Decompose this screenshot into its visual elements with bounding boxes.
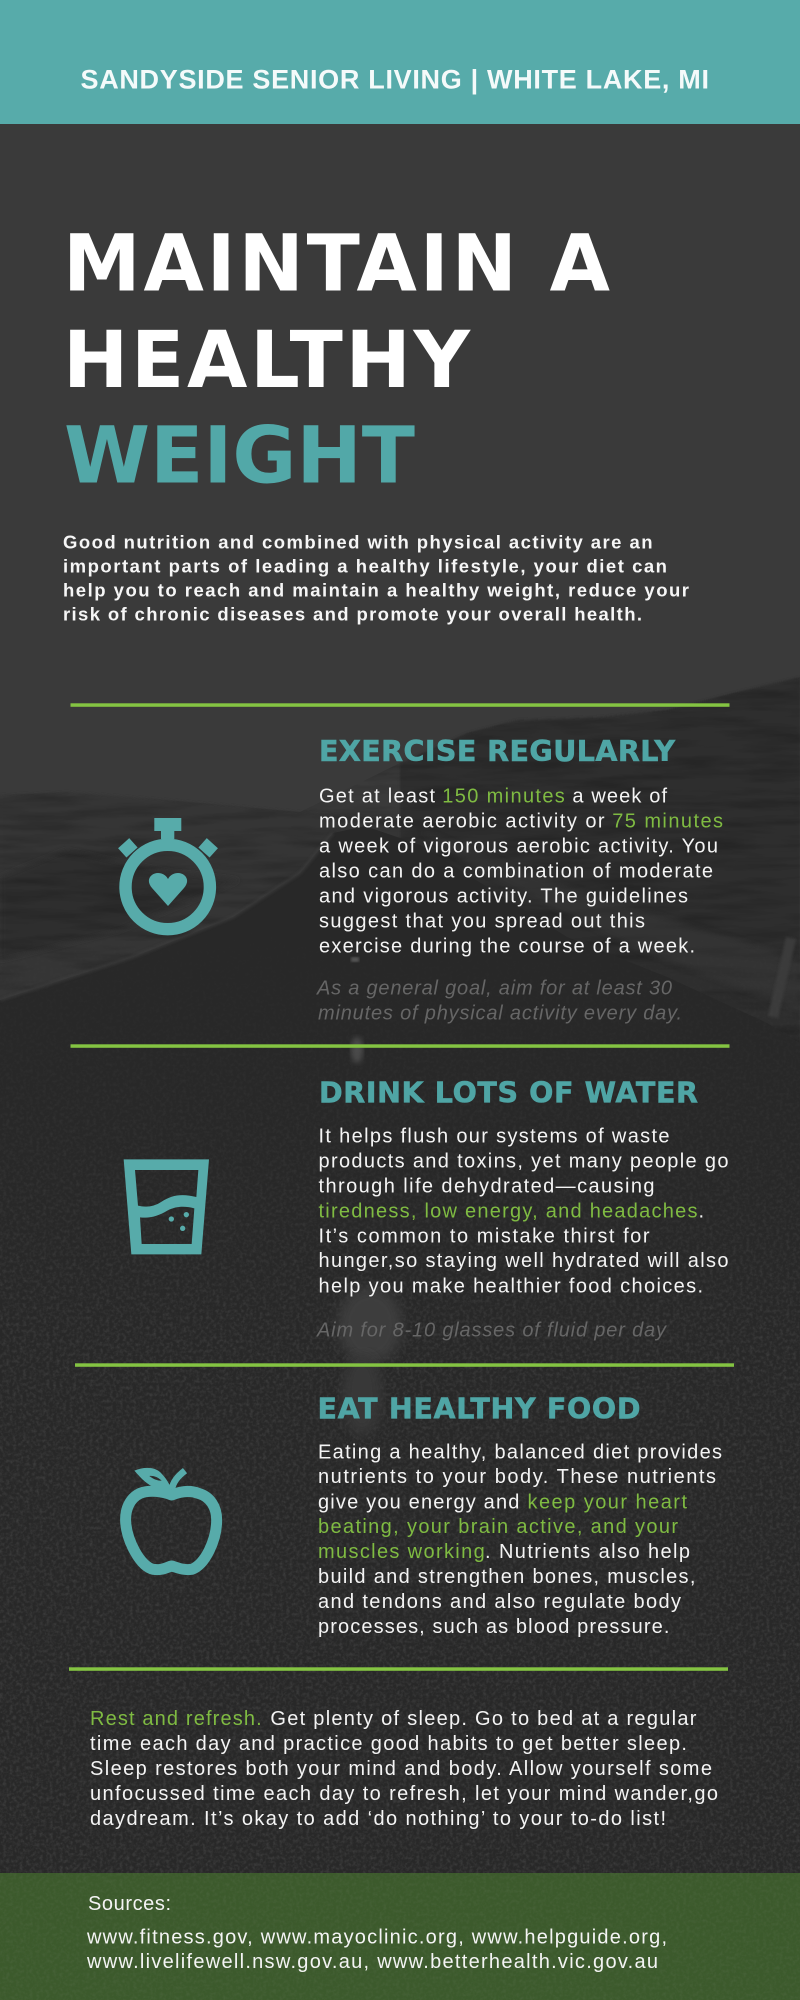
source links: www.livelifewell.nsw.gov.au, www.betterhealth.vic.gov.au: [86, 1951, 658, 1973]
heading: EAT HEALTHY FOOD: [318, 1393, 640, 1426]
body text: [318, 1125, 728, 1297]
rest and refresh paragraph: unfocussed time each day to refresh, let your mind wander,go: [90, 1783, 718, 1805]
body text: help you make healthier food choices.: [318, 1275, 703, 1297]
rest and refresh paragraph: daydream. It’s okay to add ‘do nothing’ to your to-do list!: [90, 1808, 666, 1830]
body text: 150 minutes: [442, 785, 565, 807]
intro paragraph: [63, 532, 689, 625]
body text: beating, your brain active, and your: [318, 1516, 678, 1538]
sources label: Sources:: [88, 1893, 171, 1915]
body text: It helps flush our systems of waste: [318, 1125, 670, 1147]
heading: EXERCISE REGULARLY: [319, 735, 675, 768]
rest and refresh paragraph: Rest and refresh.: [90, 1708, 262, 1730]
body text: and tendons and also regulate body: [318, 1591, 681, 1613]
body text: muscles working: [318, 1541, 485, 1563]
heading: DRINK LOTS OF WATER: [319, 1076, 698, 1109]
panel: drink lots of water: [124, 1076, 729, 1342]
footer band: sources: [0, 1873, 800, 2000]
body text: tiredness, low energy, and headaches: [318, 1200, 698, 1222]
body text: 75 minutes: [612, 810, 723, 832]
body text: processes, such as blood pressure.: [318, 1616, 669, 1638]
body text: build and strengthen bones, muscles,: [318, 1566, 695, 1588]
body text: Get at least: [319, 785, 435, 807]
divider 1: [70, 703, 730, 707]
rest and refresh paragraph: [90, 1708, 718, 1830]
title: MAINTAIN A: [63, 220, 610, 310]
title: [63, 220, 610, 502]
body text: give you energy and: [318, 1491, 519, 1513]
divider 4: [69, 1667, 728, 1671]
body text: [318, 1441, 722, 1638]
title: HEALTHY: [63, 316, 472, 406]
rest and refresh paragraph: time each day and practice good habits to get better sleep.: [90, 1733, 687, 1755]
body text: a week of: [572, 785, 667, 807]
header band: [0, 0, 800, 124]
panel: exercise regularly: [118, 735, 723, 1024]
intro paragraph: important parts of leading a healthy lifestyle, your diet can: [63, 555, 667, 576]
goal note: As a general goal, aim for at least 30: [316, 977, 672, 999]
body text: .: [698, 1200, 704, 1222]
rest and refresh paragraph: Get plenty of sleep. Go to bed at a regular: [270, 1708, 697, 1730]
body text: suggest that you spread out this: [319, 911, 645, 933]
panel: eat healthy food: [126, 1393, 722, 1638]
body text: Eating a healthy, balanced diet provides: [318, 1441, 722, 1463]
goal note: minutes of physical activity every day.: [318, 1002, 682, 1024]
body text: a week of vigorous aerobic activity. You: [319, 836, 718, 858]
background photo: mountain road: [0, 678, 800, 1873]
source links: [86, 1926, 667, 1973]
divider 3: [75, 1363, 734, 1367]
icon: stopwatch with heart: [118, 818, 218, 929]
body text: exercise during the course of a week.: [319, 935, 695, 957]
body text: It’s common to mistake thirst for: [318, 1225, 650, 1247]
body text: . Nutrients also help: [485, 1541, 690, 1563]
body text: keep your heart: [528, 1491, 687, 1513]
body text: [319, 785, 723, 957]
icon: apple: [126, 1468, 217, 1570]
intro paragraph: Good nutrition and combined with physical activity are an: [63, 532, 652, 553]
body text: nutrients to your body. These nutrients: [318, 1466, 716, 1488]
divider 2: [70, 1044, 730, 1048]
intro paragraph: help you to reach and maintain a healthy weight, reduce your: [63, 579, 689, 600]
icon: glass of water: [124, 1159, 209, 1254]
rest and refresh paragraph: Sleep restores both your mind and body. Allow yourself some: [90, 1758, 712, 1780]
source links: www.fitness.gov, www.mayoclinic.org, www.helpguide.org,: [86, 1926, 667, 1948]
body text: and vigorous activity. The guidelines: [319, 886, 688, 908]
body text: also can do a combination of moderate: [319, 860, 713, 882]
title: WEIGHT: [64, 412, 415, 502]
hydration note: Aim for 8-10 glasses of fluid per day: [316, 1320, 667, 1342]
body text: hunger,so staying well hydrated will also: [318, 1250, 728, 1272]
goal note: [316, 977, 682, 1024]
header text: SANDYSIDE SENIOR LIVING | WHITE LAKE, MI: [80, 64, 709, 94]
body text: through life dehydrated—causing: [318, 1176, 654, 1198]
intro paragraph: risk of chronic diseases and promote your overall health.: [63, 604, 642, 625]
body text: products and toxins, yet many people go: [318, 1150, 728, 1172]
body text: moderate aerobic activity or: [319, 810, 605, 832]
